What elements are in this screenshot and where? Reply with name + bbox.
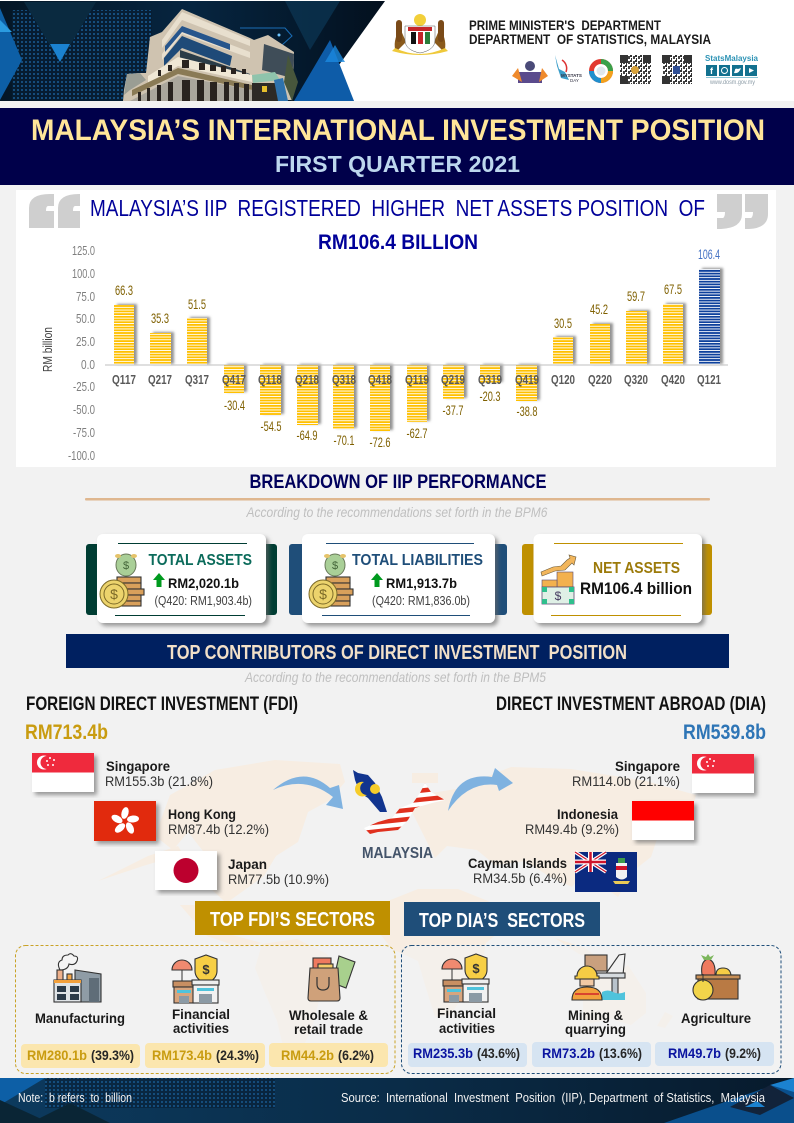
icon: Statistics Malaysia building: [123, 9, 298, 101]
Singapore DIA label: RM114.0b (21.1%): [572, 773, 680, 789]
chip: agriculture value: (9.2%): [725, 1045, 761, 1061]
quarter labels: Q121: [697, 372, 721, 387]
card: net assets: NET ASSETS: [593, 560, 680, 577]
chip: financial value: (24.3%): [216, 1047, 259, 1063]
logo: MyStats Day: DAY: [570, 78, 579, 83]
heading: top DIA sectors: TOP DIA’S SECTORS: [419, 910, 585, 932]
card: total liabilities: TOTAL LIABILITIES: [352, 552, 483, 569]
card: net assets: [522, 534, 712, 623]
chip: wholesale value: (6.2%): [338, 1047, 374, 1063]
DIA total: RM539.8b: [683, 721, 766, 744]
FDI total: RM713.4b: [25, 721, 108, 744]
value labels: -30.4: [224, 398, 245, 413]
Hong Kong label: [168, 806, 269, 837]
y axis labels: 50.0: [76, 311, 95, 326]
heading: top FDI sectors: TOP FDI’S SECTORS: [210, 909, 375, 931]
footnote: Note: b refers to billion: [18, 1091, 132, 1105]
label: mining and quarrying: [565, 1007, 626, 1037]
note BPM5: According to the recommendations set forth in the BPM5: [244, 669, 546, 685]
header department text: PRIME MINISTER'S DEPARTMENT: [469, 18, 662, 33]
card: total liabilities: [289, 534, 507, 623]
header department text: DEPARTMENT OF STATISTICS, MALAYSIA: [469, 32, 711, 47]
value labels: 67.5: [664, 282, 682, 297]
Cayman Islands label: RM34.5b (6.4%): [473, 870, 567, 886]
chip: mining value: [532, 1042, 651, 1067]
card: total liabilities: (Q420: RM1,836.0b): [372, 594, 470, 608]
card: total assets: (Q420: RM1,903.4b): [154, 594, 252, 608]
flag: Cayman Islands: [575, 852, 637, 892]
StatsMalaysia social block: www.dosm.gov.my: [709, 80, 755, 86]
map of Malaysia in flag colours: [353, 770, 445, 834]
quarter labels: Q417: [222, 372, 246, 387]
quarter labels: Q117: [112, 372, 136, 387]
heading: top FDI sectors: [195, 901, 390, 935]
chip: mining value: RM73.2b: [542, 1045, 595, 1061]
quarter labels: Q118: [258, 372, 282, 387]
y axis labels: -100.0: [68, 448, 95, 463]
card: total assets: [86, 534, 277, 623]
icon: money and rising arrow: [541, 555, 576, 604]
flag: Singapore (DIA): [692, 754, 754, 793]
logo: census figures: [512, 61, 548, 83]
icon: factory: [54, 954, 101, 1002]
heading: FDI: FOREIGN DIRECT INVESTMENT (FDI): [26, 693, 298, 715]
icon: financial activities: [442, 954, 489, 1002]
label: financial activities: [172, 1006, 230, 1036]
world map background: [98, 760, 696, 1063]
value labels: [115, 247, 720, 450]
y axis title: RM billion: [40, 327, 55, 372]
arrow: FDI into Malaysia: [273, 776, 343, 809]
panel: FDI sectors: [16, 946, 395, 1074]
chip: wholesale value: RM44.2b: [281, 1047, 334, 1063]
label: wholesale and retail trade: retail trade: [294, 1021, 363, 1037]
StatsMalaysia social block: f: [710, 66, 714, 76]
arrow: Malaysia to DIA: [448, 768, 513, 811]
QR code 2: [662, 55, 692, 84]
footer band: [0, 1078, 794, 1123]
chip: manufacturing value: [21, 1044, 140, 1068]
Singapore FDI label: [105, 758, 213, 789]
Cayman Islands label: [468, 855, 567, 886]
quarter labels: Q217: [148, 372, 172, 387]
Japan label: RM77.5b (10.9%): [228, 871, 329, 887]
label: financial activities: [437, 1005, 496, 1036]
Indonesia label: RM49.4b (9.2%): [525, 821, 619, 837]
panel: headline and bar chart: [16, 190, 776, 467]
chip: financial value: RM235.3b: [413, 1045, 473, 1061]
icon: opening quote: [29, 194, 80, 228]
banner: top contributors: [66, 634, 729, 668]
card: total liabilities: RM1,913.7b: [386, 575, 457, 591]
flag: Japan: [155, 851, 217, 890]
value labels: -62.7: [406, 426, 428, 441]
label: financial activities: activities: [173, 1020, 229, 1036]
title banner: [0, 108, 794, 185]
quarter labels: [112, 372, 721, 387]
StatsMalaysia social block: [705, 54, 759, 86]
value labels: -38.8: [516, 404, 538, 419]
y axis labels: 75.0: [76, 289, 95, 304]
quarter labels: Q220: [588, 372, 612, 387]
value labels: 59.7: [627, 289, 645, 304]
card: total assets: RM2,020.1b: [168, 575, 239, 591]
quarter labels: Q218: [295, 372, 319, 387]
value labels: -72.6: [370, 435, 390, 450]
Singapore FDI label: RM155.3b (21.8%): [105, 773, 213, 789]
Indonesia label: Indonesia: [557, 806, 618, 822]
quarter labels: Q320: [624, 372, 648, 387]
quarter labels: Q318: [332, 372, 356, 387]
icon: coins and clock: [100, 554, 144, 608]
label: manufacturing: Manufacturing: [35, 1010, 125, 1026]
icon: financial activities: [172, 955, 219, 1003]
value labels: -70.1: [334, 433, 354, 448]
quarter labels: Q317: [185, 372, 209, 387]
Indonesia label: [525, 806, 619, 837]
label: mining and quarrying: quarrying: [565, 1021, 626, 1037]
panel: DIA sectors: [402, 946, 781, 1074]
quarter labels: Q418: [368, 372, 392, 387]
icon: mining worker and rig: [572, 954, 625, 1000]
icon: coins and clock: [309, 554, 353, 608]
value labels: 106.4: [698, 247, 720, 262]
flag: Singapore (FDI): [32, 753, 94, 792]
headline value: RM106.4 BILLION: [318, 231, 478, 254]
icon: money and rising arrow: $: [555, 589, 562, 603]
y axis labels: -75.0: [73, 425, 95, 440]
y axis labels: 0.0: [81, 357, 95, 372]
Malaysia label: MALAYSIA: [362, 845, 433, 862]
y axis labels: -50.0: [73, 402, 95, 417]
value labels: -20.3: [480, 389, 500, 404]
label: mining and quarrying: Mining &: [568, 1007, 623, 1023]
chip: manufacturing value: (39.3%): [91, 1047, 134, 1063]
StatsMalaysia social block: StatsMalaysia: [705, 54, 759, 63]
Singapore DIA label: Singapore: [615, 758, 680, 774]
logo: SDG wheel: [592, 62, 610, 80]
label: financial activities: Financial: [172, 1006, 230, 1022]
heading: top DIA sectors: [404, 902, 600, 936]
chip: financial value: (43.6%): [477, 1045, 520, 1061]
logo: MyStats Day: [555, 55, 582, 83]
y axis labels: 125.0: [72, 243, 95, 258]
y axis labels: 25.0: [76, 334, 95, 349]
y axis labels: 100.0: [72, 266, 95, 281]
chip: manufacturing value: RM280.1b: [27, 1047, 87, 1063]
heading: breakdown: BREAKDOWN OF IIP PERFORMANCE: [250, 472, 546, 493]
value labels: -54.5: [260, 419, 282, 434]
icon: up arrow: [371, 573, 383, 587]
banner: top contributors: TOP CONTRIBUTORS OF DIRECT INVESTMENT POSITION: [167, 642, 627, 664]
Singapore FDI label: Singapore: [106, 758, 170, 774]
icon: closing quote: [717, 194, 768, 229]
chip: financial value: [408, 1043, 527, 1067]
chip: agriculture value: RM49.7b: [668, 1045, 721, 1061]
quarter labels: Q119: [405, 372, 429, 387]
icon: shopping bag and cards: [308, 956, 355, 1001]
chip: financial value: [145, 1043, 265, 1068]
icon: fruit crate: [693, 954, 740, 1000]
chip: financial value: RM173.4b: [152, 1047, 212, 1063]
Hong Kong label: Hong Kong: [168, 806, 236, 822]
quarter labels: Q219: [441, 372, 465, 387]
value labels: -64.9: [296, 428, 318, 443]
Cayman Islands label: Cayman Islands: [468, 855, 567, 871]
quarter labels: Q120: [551, 372, 575, 387]
y axis labels: [68, 243, 95, 463]
quarter labels: Q420: [661, 372, 685, 387]
label: wholesale and retail trade: [289, 1007, 368, 1037]
value labels: -37.7: [442, 403, 464, 418]
note BPM6: According to the recommendations set forth in the BPM6: [246, 504, 548, 520]
QR code 1: [620, 55, 651, 84]
logo: MyStats Day: MYSTATS: [561, 73, 582, 78]
Singapore DIA label: [572, 758, 680, 789]
value labels: 51.5: [188, 297, 206, 312]
value labels: 30.5: [554, 316, 572, 331]
subtitle: FIRST QUARTER 2021: [275, 151, 520, 177]
quarter labels: Q319: [478, 372, 502, 387]
chip: agriculture value: [655, 1042, 774, 1066]
Japan label: [228, 856, 329, 887]
quarter labels: Q419: [515, 372, 539, 387]
flag: Hong Kong: [94, 801, 156, 841]
value labels: 45.2: [590, 302, 608, 317]
label: financial activities: Financial: [437, 1005, 496, 1021]
Japan label: Japan: [228, 856, 267, 872]
bars: [114, 269, 720, 431]
value labels: 35.3: [151, 311, 169, 326]
header department text: [469, 18, 711, 47]
label: financial activities: activities: [439, 1020, 495, 1036]
label: wholesale and retail trade: Wholesale &: [289, 1007, 368, 1023]
chip: wholesale value: [269, 1043, 388, 1067]
Hong Kong label: RM87.4b (12.2%): [168, 821, 269, 837]
header: white band: [0, 0, 794, 101]
main title: MALAYSIA’S INTERNATIONAL INVESTMENT POSITION: [31, 114, 765, 147]
label: agriculture: Agriculture: [681, 1010, 751, 1026]
icon: national crest: [392, 14, 448, 55]
icon: up arrow: [153, 573, 165, 587]
header image: building on digital background: [0, 1, 385, 101]
card: net assets: RM106.4 billion: [580, 579, 692, 598]
y axis labels: -25.0: [73, 379, 95, 394]
value labels: 66.3: [115, 283, 133, 298]
chip: mining value: (13.6%): [599, 1045, 642, 1061]
bar chart: [40, 243, 728, 463]
flag: Indonesia: [632, 801, 694, 840]
card: total assets: TOTAL ASSETS: [148, 552, 252, 569]
